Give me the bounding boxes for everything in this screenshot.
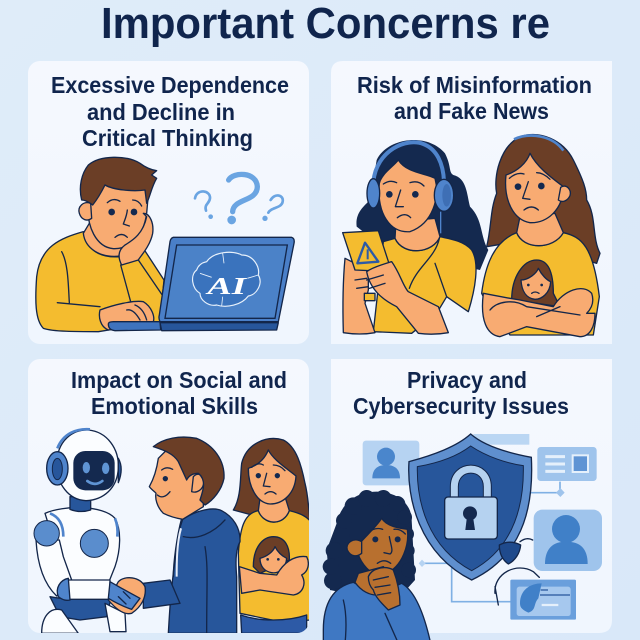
ear [79,203,92,220]
robot [34,429,126,633]
man arm [143,580,180,608]
heading: social: Impact on Social and [71,367,287,393]
worried girl hair [233,439,310,523]
worried woman [323,490,431,640]
left girl shirt [373,237,476,333]
left girl hair [356,140,488,270]
panel: excessive dependence [28,61,309,344]
heading: excessive dependence: and Decline in [87,99,235,125]
panel: misinformation [331,61,612,344]
connector node right [556,488,565,497]
padlock [445,469,497,539]
crossed arms [482,289,595,337]
illustration: worried man at AI laptop [36,157,294,332]
man head [149,450,203,519]
girl shirt [238,511,312,622]
handshake [108,578,145,614]
robot head [57,430,118,501]
right girl shirt [482,233,599,335]
heading: social: Emotional Skills [91,393,258,419]
ID card [510,580,576,620]
phone with warning [343,231,392,272]
shirt print child [253,537,289,573]
right girl face [506,153,563,223]
document card [537,447,597,481]
headphones [367,142,454,297]
hand on cheek [119,213,153,265]
brain AI icon: AI [204,274,249,300]
left girl neck [395,218,440,251]
title: Important Concerns re [101,0,550,48]
sweater lines [57,252,163,307]
connector lines [423,482,560,602]
yellow sweater [36,232,164,332]
shirt print child [512,260,560,307]
head [88,180,149,249]
right arm [367,262,448,334]
man hoodie [168,509,240,633]
large profile card [534,510,602,571]
face features [107,200,142,237]
headband [514,136,563,151]
heading: excessive dependence [51,72,289,151]
right girl hair [487,135,600,263]
robot torso [45,508,120,583]
dark shield fragment [495,539,539,605]
illustration: robot, man, worried girl [34,429,312,633]
neck and blush [83,223,125,256]
right girl neck [517,213,563,246]
heading: privacy [353,367,569,419]
heading: excessive dependence: Critical Thinking [82,125,253,151]
question marks [195,174,283,224]
girl crossed arms [239,556,308,595]
robot arm [36,540,72,596]
heading: privacy: Privacy and [407,367,527,393]
heading: privacy: Cybersecurity Issues [353,393,569,419]
robot neck [70,497,91,512]
left girl face [379,160,437,232]
illustration: shield, data cards, worried woman [323,434,602,640]
heading: misinformation: Risk of Misinformation [357,72,592,98]
girl neck and face [258,497,289,522]
curly hair [323,490,416,597]
profile card [363,441,419,485]
panel: social and emotional [28,359,312,633]
heading: misinformation: and Fake News [394,98,549,124]
illustration: two worried girls [343,135,600,337]
panel: privacy and cybersecurity [323,359,612,640]
top bar [473,434,529,445]
typing hand [99,301,154,330]
heading: social [71,367,287,419]
laptop [108,237,294,331]
brain AI icon [193,252,260,306]
phone hand and arm [343,258,375,334]
connector node left [419,560,426,567]
heading: misinformation [357,72,592,124]
shield [409,434,532,580]
hair [80,157,157,205]
woman hand on chin [368,568,400,610]
heading: excessive dependence: Excessive Dependence [51,72,289,98]
